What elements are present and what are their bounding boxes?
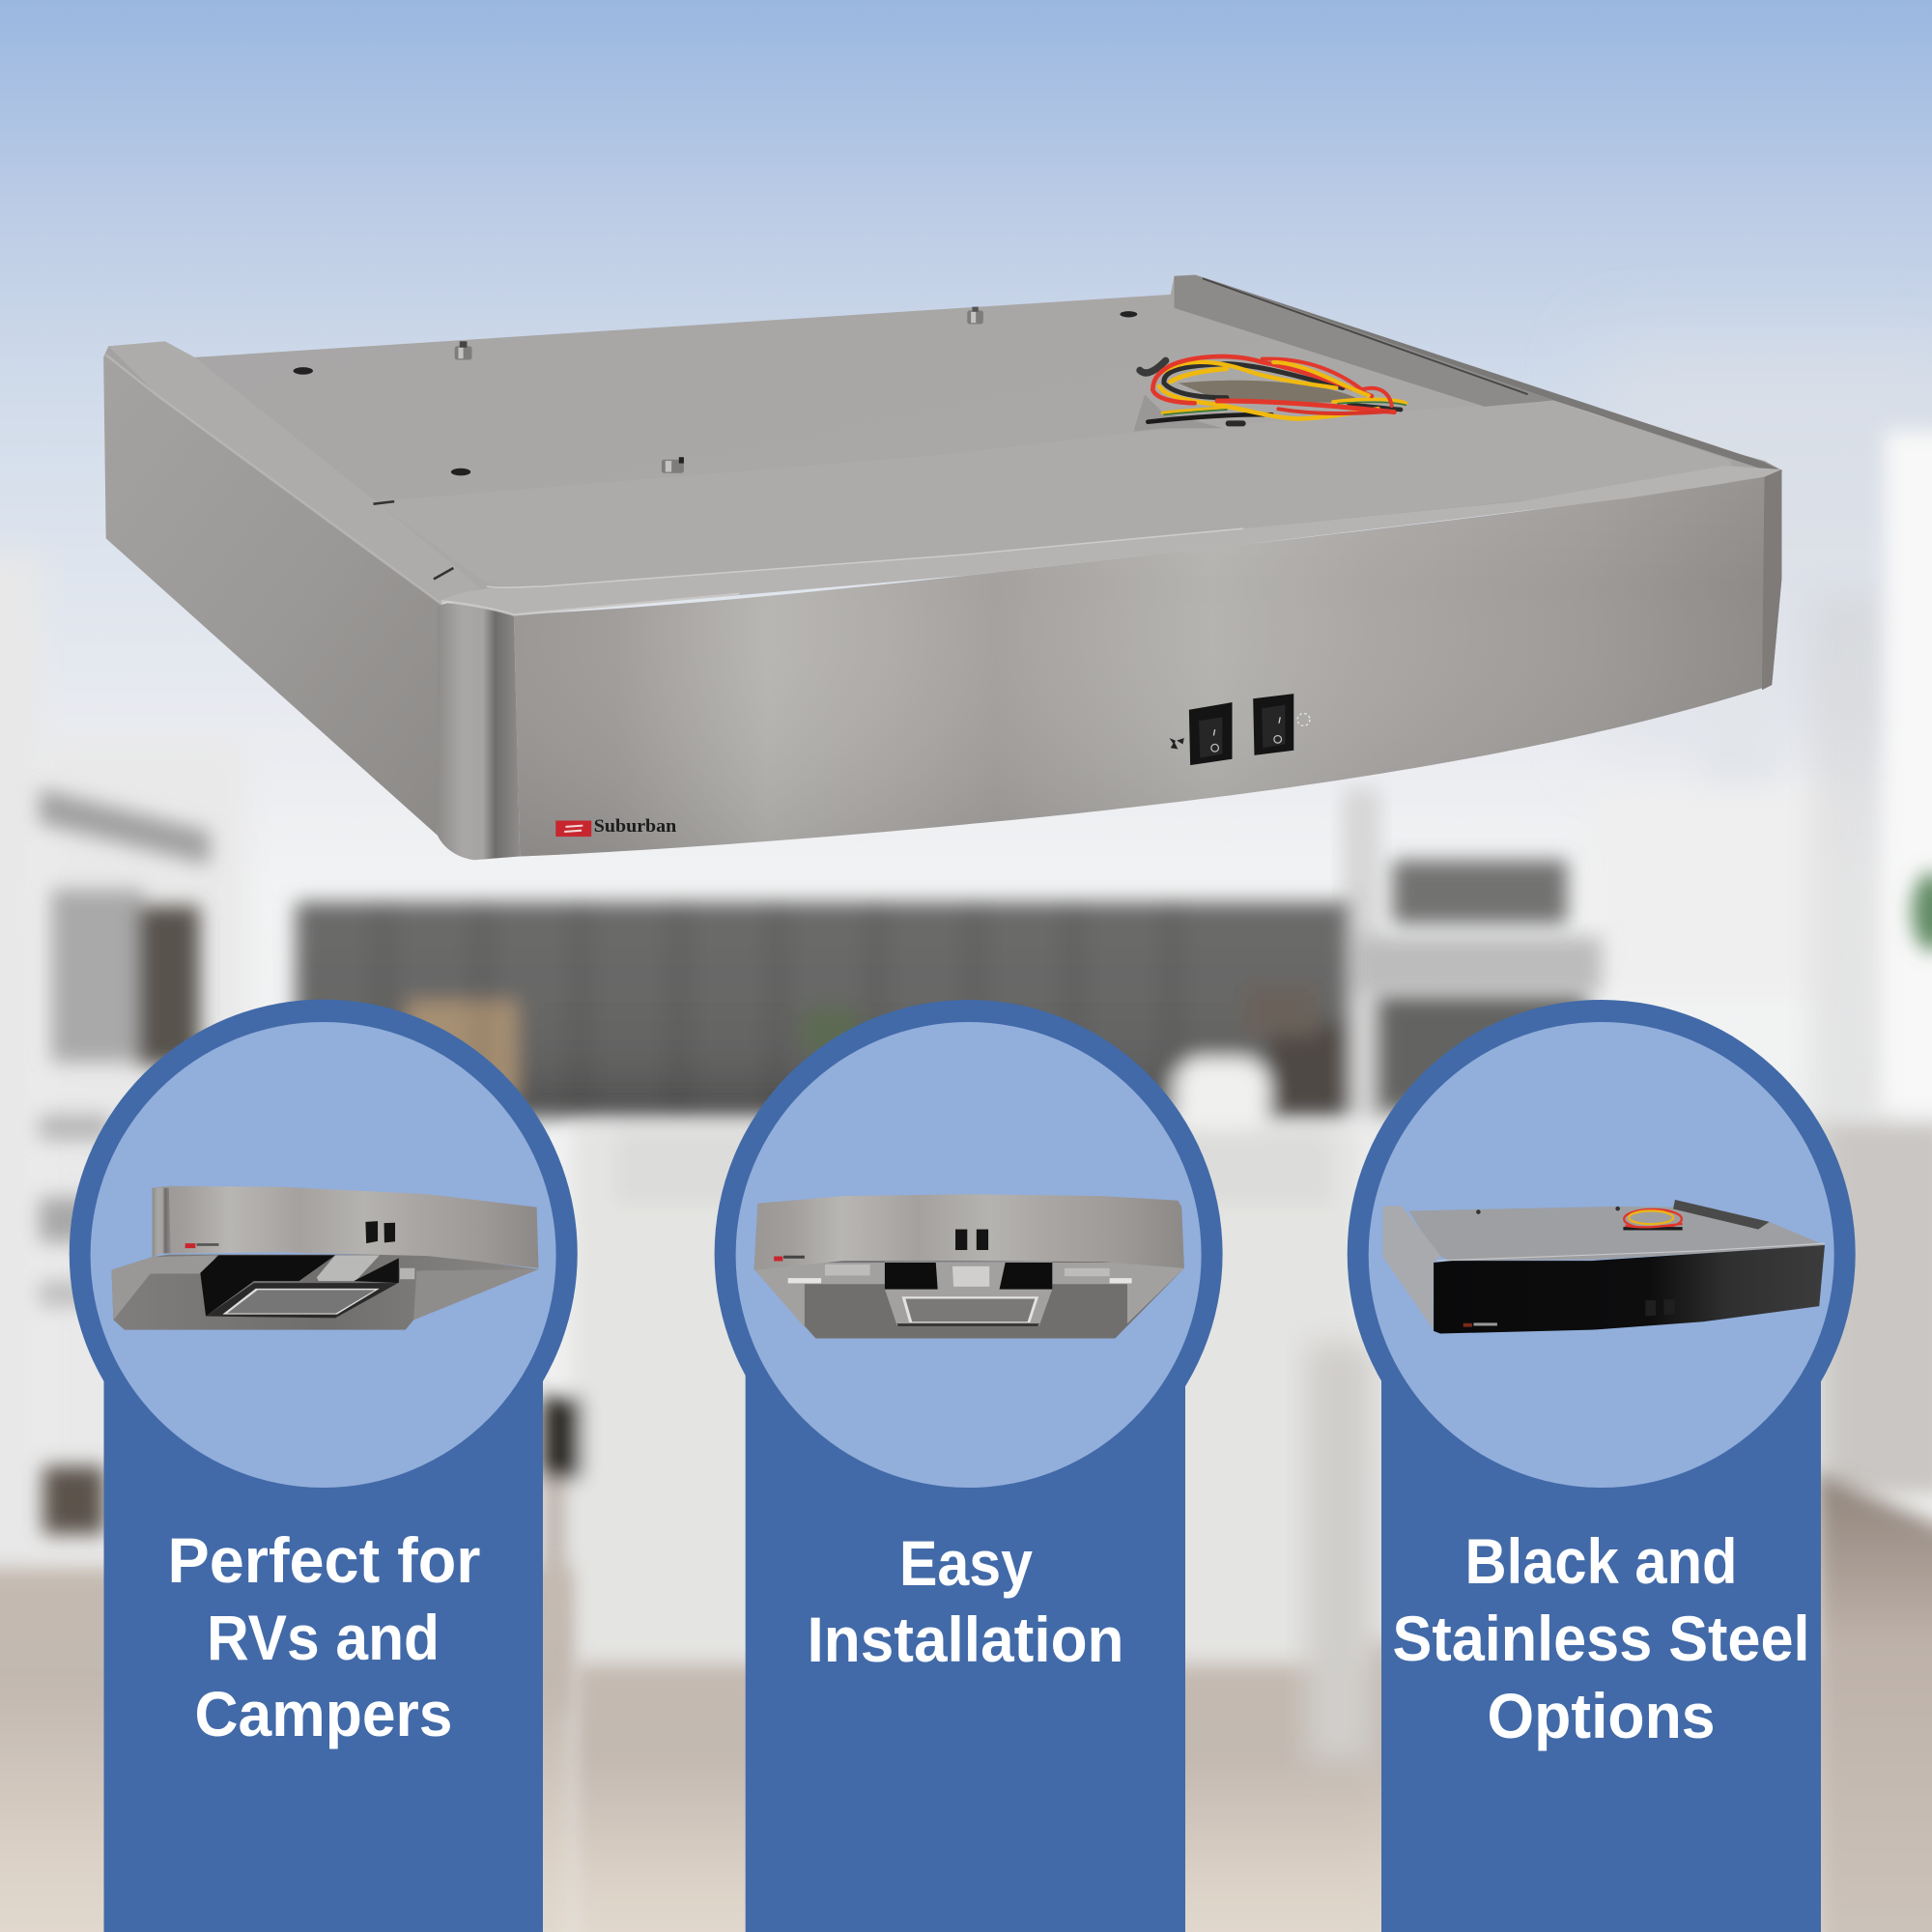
label text [168, 1524, 481, 1749]
circle [736, 1022, 1202, 1488]
black hood [1383, 1200, 1825, 1334]
right rail [1175, 274, 1553, 407]
mounting studs and holes [294, 307, 1137, 475]
wiring bundle [1133, 356, 1406, 432]
left side panel [103, 341, 480, 836]
Suburban logo: Suburban [594, 816, 677, 837]
panel: easy installation [715, 1000, 1223, 1932]
label text: Installation [808, 1604, 1124, 1675]
Suburban logo [555, 816, 677, 837]
hood view from below [111, 1186, 539, 1330]
front top edge band [441, 466, 1781, 614]
label text: Black and [1464, 1525, 1737, 1597]
front corner strip [438, 603, 520, 860]
main product: stainless range hood [103, 274, 1783, 860]
front panel [514, 469, 1781, 856]
rocker switches [1169, 694, 1310, 765]
label text: Perfect for [168, 1524, 481, 1596]
label text: Easy [899, 1527, 1033, 1599]
panel: black and stainless steel options [1348, 1000, 1856, 1932]
panel background [715, 1000, 1223, 1932]
panel background [70, 1000, 578, 1932]
hood front view from below [753, 1194, 1184, 1338]
panel: perfect for RVs and campers [70, 1000, 578, 1932]
label text: RVs and [207, 1602, 440, 1673]
label text [808, 1527, 1124, 1675]
label text: Stainless Steel [1393, 1603, 1810, 1674]
panel background [1348, 1000, 1856, 1932]
circle [1369, 1022, 1834, 1488]
hood top surface [195, 276, 1783, 604]
backsplash stripes [1173, 1074, 1179, 1097]
label text: Campers [195, 1678, 452, 1749]
label text: Options [1488, 1680, 1716, 1751]
label text [1393, 1525, 1810, 1751]
circle [91, 1022, 556, 1488]
